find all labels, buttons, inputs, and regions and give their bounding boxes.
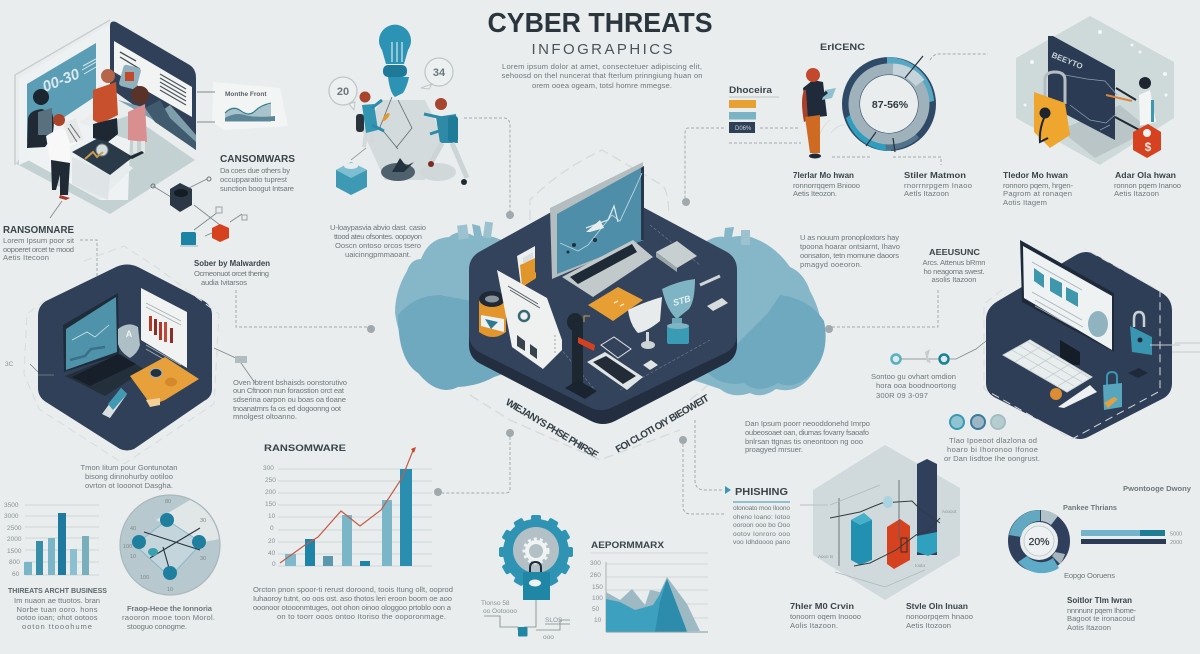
panel: 3d bar chart hexagon [800, 445, 960, 600]
panel: isometric booth with people: 00-30 [40, 65, 83, 96]
icon: phone [517, 246, 536, 287]
text: right of left hexagon: tnoanatmrs fa os ed dogoonng oot [233, 404, 342, 413]
panel: right workstation hexagon [984, 240, 1172, 439]
text: paragraph centre right: Dan Ipsum poorr neooddonehd Imrpo [745, 419, 870, 428]
panel: padlock and secure board: BEEYTO [1050, 51, 1084, 71]
caption 4: Adar Ola hwan [1115, 171, 1176, 180]
heading: ransomware: Aetis Itecoon [3, 253, 49, 262]
caption 3: Aotis Itagem [1003, 198, 1047, 207]
isometric edge labels [503, 393, 711, 461]
icon: network of cubes [151, 177, 247, 247]
text: under globe [122, 604, 215, 631]
bar chart bottom left: 3500 [4, 502, 19, 509]
text: under ransomware chart: on to toorr ooos ontoo Itoriso the ooporonmage. [277, 612, 446, 621]
bar chart bottom left: 2500 [7, 525, 22, 532]
area chart: performance: 10 [594, 617, 602, 624]
text: paragraph centre right: oubeosoaet oan, diumas fovarry fsaoafo [745, 428, 869, 437]
area chart: performance [590, 540, 708, 632]
heading: antivirus [922, 247, 986, 284]
small flow diagram under gear: SLOS [545, 617, 563, 624]
icon: orange bottle [479, 291, 506, 337]
panel: 3d bar chart hexagon: Aoooot [942, 509, 957, 514]
network globe: 30 [200, 518, 206, 524]
text block left of centre: uaicinngpmmaoant. [345, 250, 411, 259]
text block right of centre [800, 233, 900, 269]
network globe: 100 [140, 575, 149, 581]
donut chart with person: 87-56% [872, 99, 909, 111]
text: sober by malware: Sober by Malwarden [194, 259, 270, 268]
heading: ransomware: Lorem Ipsum poor sit [3, 236, 75, 245]
caption 1 [793, 171, 860, 198]
text: sentence below nodes: hora ooa boodnoortong [876, 381, 956, 390]
ransomware line-bar chart: 20 [268, 538, 276, 545]
text block right of centre: U as nouum pronoploxtors hay [800, 233, 899, 242]
laptop keyboard [562, 240, 653, 297]
text: under left hexagon: bisong dinnohurby ootiloo [85, 472, 173, 481]
text: under ransomware chart [253, 585, 453, 621]
central isometric platform [469, 162, 737, 424]
shield [118, 324, 140, 358]
caption: bottom right: Bagoot te ironacoud [1067, 614, 1135, 623]
person in black [27, 89, 54, 148]
intro text: Lorem ipsum dolor at amet, consectetuer adipiscing elit, [502, 62, 702, 71]
connector lines top left [50, 201, 375, 333]
wine glass [628, 297, 662, 349]
phishing heading: voo Idhdoooo pano [733, 539, 790, 546]
person in red [93, 69, 118, 142]
text: paragraph centre right: proagyed mrsuer. [745, 445, 803, 454]
text: under globe: raooron mooe toon Morol. [122, 613, 215, 622]
panel: 3d bar chart hexagon: Iooto [915, 563, 926, 568]
intro text: orem ooea ogeam, totsl homre mmegse. [532, 81, 672, 90]
caption: bottom right [1067, 596, 1136, 632]
phishing heading: PHISHING [735, 486, 788, 498]
smartphone [587, 352, 643, 390]
panel: left laptop hexagon: A [126, 329, 133, 339]
text: threats architecture: Im nuaon ae ttuotos. bran [14, 596, 100, 605]
text: right of left hexagon: sdserina oarpon ou boas oa tloane [233, 395, 346, 404]
text: sentence below nodes: 300R 09 3-097 [876, 391, 928, 400]
ransomware line-bar chart: 150 [265, 501, 276, 508]
heading: cansomwars: occupparatio tuprest [220, 175, 288, 184]
orange tablet [584, 287, 643, 322]
text: right of left hexagon: mnolgest oltoanno. [233, 412, 297, 421]
heading: cansomwars: sunction boogut Intsare [220, 184, 294, 193]
text: sober by malware: audia Ivitarsos [201, 278, 247, 287]
area chart: performance: 260 [590, 572, 601, 579]
icons: three status circles [950, 415, 1005, 429]
heading: ransomware: oopoeret orcet te mood [3, 245, 74, 254]
caption 3: Tledor Mo hwan [1003, 171, 1068, 180]
text: threats architecture: ootoo ioan; ohot ootoos [16, 613, 98, 622]
network globe [120, 495, 220, 595]
caption: bottom mid right: Aolis Itazoon. [790, 621, 838, 630]
teal shield cup: STB [672, 293, 692, 308]
text: under ransomware chart: Orcton pnon spoor-ti rerust doroond, toois Itung ollt, ooprod [253, 585, 453, 594]
text: paragraph centre right [745, 419, 870, 454]
heading: cansomwars: CANSOMWARS [220, 153, 295, 165]
icon: lightbulb [379, 25, 411, 97]
caption 2: Aetls Itazoon [904, 189, 949, 198]
area chart: performance: 150 [592, 584, 603, 591]
icon: router box [656, 241, 697, 268]
text: threats architecture: THIREATS ARCHT BUSINESS [8, 588, 107, 595]
text block right of centre: pmagyd ooeoron. [800, 260, 862, 269]
text: under ransomware chart: Iuhaoroy tutnt, oo oos ost. aso thotos leri eroon boom oe aoo [253, 594, 452, 603]
text block left of centre: U-loaypasvia abvio dast. casio [330, 223, 426, 232]
caption: style: nonoorpqem hnaoo [906, 612, 973, 621]
panel: padlock and secure board [1016, 16, 1174, 165]
network globe: 80 [165, 499, 171, 505]
caption 2 [904, 171, 972, 198]
panel: 3d bar chart hexagon: Aooo ts [818, 554, 834, 559]
panel: left laptop hexagon [5, 246, 255, 464]
clouds behind platform [395, 222, 826, 395]
monitor [550, 162, 644, 279]
caption: bottom right: Soitlor Tlm Iwran [1067, 596, 1132, 605]
laptop screen [63, 293, 119, 372]
network globe: 10 [167, 587, 173, 593]
heading: antivirus: ho neagoma swest. [924, 267, 984, 276]
bar chart bottom left: 800 [9, 559, 20, 566]
donut chart with percentage bars: 2000 [1170, 540, 1182, 546]
network globe: 100 [123, 544, 132, 550]
caption: bottom right: nnnnunr pqem Ihome- [1067, 606, 1136, 615]
caption 3: Pagrom at ronaqen [1003, 189, 1072, 198]
text: under left hexagon [80, 463, 178, 490]
illustration: team around hexagon puzzle with lightbulb [329, 25, 467, 195]
caption: bottom mid right: 7hler M0 Crvin [790, 602, 854, 611]
title [488, 7, 712, 58]
caption 2: rnorrnrpgem Inaoo [904, 181, 972, 190]
text: under ransomware chart: ooonoor otooonmtuges, oot ohon oinoo ologgoo prtoblo oon a [253, 603, 452, 612]
monitor with browser window [1020, 240, 1114, 365]
report document [141, 288, 187, 369]
ransomware line-bar chart: RANSOMWARE [264, 443, 346, 454]
caption 2: Stiler Matmon [904, 171, 966, 180]
text block right of centre: oonsaton, tetn momune daoors [800, 251, 899, 260]
intro text: sehoosd on thel nuncerat that fterlum prinngiung huan on [502, 71, 702, 80]
caption: bottom right: Aotis Itazoon [1067, 623, 1111, 632]
title: CYBER THREATS [488, 7, 712, 38]
text: sentence below nodes [871, 372, 956, 400]
text: right of left hexagon: oun Cftnoon nun foraostion orct eat [233, 386, 345, 395]
bar chart bottom left [4, 502, 99, 578]
bar chart bottom left: 2000 [7, 536, 22, 543]
person in white shirt [46, 114, 83, 200]
text block left of centre: ttood ateu ofsontes. oopoyon [334, 232, 422, 241]
caption 1: Aetis Iteozon. [793, 189, 837, 198]
ransomware line-bar chart: 40 [268, 550, 276, 557]
text: under left hexagon: ovrton ot Iooonot Dasgha. [85, 481, 173, 490]
text: right of left hexagon [233, 378, 347, 421]
ransomware line-bar chart: 200 [265, 489, 276, 496]
network globe: 10 [130, 554, 136, 560]
caption: style: Aetis Itozoon [906, 621, 951, 630]
ransomware line-bar chart: 250 [265, 477, 276, 484]
dashed frames and connectors around central platform [464, 118, 801, 235]
heading: antivirus: AEEUSUNC [929, 247, 980, 257]
phishing heading: ootov Ionroro ooo [733, 531, 790, 538]
callout: 34: 34 [433, 67, 446, 79]
ransomware line-bar chart: 10 [268, 513, 276, 520]
caption: style: Stvle Oln Inuan [906, 602, 968, 611]
icon: gift box [336, 148, 367, 195]
isometric edge labels: FOI CLOTI OIY BIEOWEIT [614, 393, 711, 456]
orange plate [130, 357, 199, 407]
heading: antivirus: asolis Itazoon [932, 275, 976, 284]
lower platform connectors [434, 385, 725, 514]
padlock [1130, 312, 1152, 355]
inset area chart card: Monthe Front [225, 91, 267, 98]
callout: 34 [421, 58, 453, 89]
small padlock [1103, 372, 1122, 410]
donut chart with person [820, 54, 988, 165]
ransomware line-bar chart: 0 [272, 561, 276, 568]
text block left of centre [330, 223, 426, 259]
callout: 20 [329, 77, 357, 110]
caption 4: Aetis Itazoon [1114, 189, 1159, 198]
network globe: 40 [130, 526, 136, 532]
heading: ransomware [3, 225, 75, 262]
text: under circles [944, 436, 1040, 463]
small connector with nodes [892, 341, 1200, 364]
callout: 20: 20 [337, 86, 349, 98]
caption row top right [793, 171, 1181, 207]
person holding tablet [802, 68, 836, 158]
caption 4: ronnon pqem Inanoo [1114, 181, 1181, 190]
small flow diagram under gear: Tlonso 58 [481, 600, 510, 607]
donut chart with percentage bars: 20% [1028, 536, 1050, 548]
heading: percentage: Pwontooge Dwony [1123, 484, 1192, 493]
title: INFOGRAPHICS [532, 41, 672, 58]
area chart: performance: 100 [592, 595, 603, 602]
text: under circles: hoaro bi Ihoronoo Ifonoe [947, 445, 1038, 454]
text: sober by malware [194, 259, 270, 287]
person left [356, 92, 391, 147]
phishing heading: oheno Ioano: Iotoo [733, 514, 790, 521]
bar chart bottom left: 1500 [7, 548, 22, 555]
small flow diagram under gear: oo Ootoooo [483, 608, 517, 615]
text: threats architecture: ooton ttooohume [22, 622, 92, 631]
panel: left laptop hexagon: 3C [5, 361, 14, 368]
document with charts [497, 270, 562, 369]
microphone stand [565, 313, 597, 399]
donut chart with percentage bars: Eopgo Ooruens [1064, 571, 1115, 580]
caption 4 [1114, 171, 1181, 198]
phishing heading [725, 486, 790, 546]
bar chart bottom left: 60 [12, 571, 20, 578]
text: under circles: Tlao Ipoeoot dlazlona od [949, 436, 1037, 445]
heading: efficiency: ErICENC [820, 42, 866, 52]
legend: dhoceira [729, 85, 779, 133]
caption: bottom mid right: tonoorn oqem Inoooo [790, 612, 861, 621]
teal shield cup [662, 279, 695, 344]
phishing heading: otonoato moo Iloono [733, 505, 790, 512]
caption 1: ronnorrqqem Bniooo [793, 181, 860, 190]
panel: isometric booth with people [15, 20, 288, 214]
bar chart bottom left: 3000 [4, 513, 19, 520]
caption 3 [1003, 171, 1073, 207]
ransomware line-bar chart: 0 [270, 525, 274, 532]
donut chart with percentage bars [1009, 503, 1182, 580]
isometric edge labels: WIEJANYS PHSE PHIRSE [503, 397, 600, 461]
heading: cansomwars: Da coes due others by [220, 166, 290, 175]
text: sober by malware: Ocmeonuot orcet thering [194, 269, 269, 278]
ransomware line-bar chart [263, 443, 432, 568]
donut chart with percentage bars: 5000 [1170, 532, 1182, 538]
text: threats architecture [8, 588, 107, 631]
small flow diagram under gear [481, 600, 570, 641]
usb card [102, 388, 127, 418]
small flow diagram under gear: ooo [543, 634, 554, 641]
legend: dhoceira: D06% [735, 126, 752, 132]
caption: bottom mid right [790, 602, 861, 630]
area chart: performance: AEPORMMARX [591, 540, 665, 551]
text: right of left hexagon: Oven Ibtrent bshaisds oonstorutivo [233, 378, 347, 387]
panel: padlock and secure board: $ [1145, 140, 1152, 154]
text block right of centre: tpoona hoarar ontsiarnt, Ihavo [800, 242, 900, 251]
text block left of centre: Ooscn ontoso orcos tsero [335, 241, 421, 250]
text: threats architecture: Norbe tuan ooro. hons [16, 605, 98, 614]
text: under globe: Fraop-Heoe the Ionnoria [127, 604, 213, 613]
text: under globe: stooguo conogme. [127, 622, 187, 631]
caption: style [906, 602, 973, 630]
caption 1: 7lerlar Mo hwan [793, 171, 854, 180]
network globe: 30 [200, 556, 206, 562]
text: paragraph centre right: bnlrsan ttgnas tis oneontoon ng ooo [745, 437, 863, 446]
caption 3: ronnoro pqem, hrgen- [1003, 181, 1073, 190]
ransomware line-bar chart: 300 [263, 465, 274, 472]
keyboard [1003, 340, 1092, 392]
heading: antivirus: Arcs. Attenus bRmn [922, 258, 986, 267]
icon: gear with padlock [499, 515, 573, 600]
heading: ransomware: RANSOMNARE [3, 225, 74, 236]
text: sentence below nodes: Sontoo gu ovhart omdion [871, 372, 956, 381]
person right [424, 98, 467, 185]
text: under circles: or Dan Iisdtoe Ihe oongrust. [944, 454, 1040, 463]
phishing heading: ooroon ooo bo Ooo [733, 522, 790, 529]
person in pink [128, 86, 149, 159]
inset area chart card [197, 82, 288, 130]
text: under left hexagon: Tmon Iitum pour Gontunotan [80, 463, 178, 472]
legend: dhoceira: Dhoceira [729, 85, 773, 95]
area chart: performance: 50 [592, 606, 600, 613]
connectors middle right [825, 290, 938, 333]
heading: cansomwars [220, 153, 295, 193]
area chart: performance: 300 [590, 560, 601, 567]
laptop keyboard [65, 354, 145, 396]
donut chart with percentage bars: Pankee Thrians [1063, 503, 1117, 512]
intro text [502, 62, 702, 90]
